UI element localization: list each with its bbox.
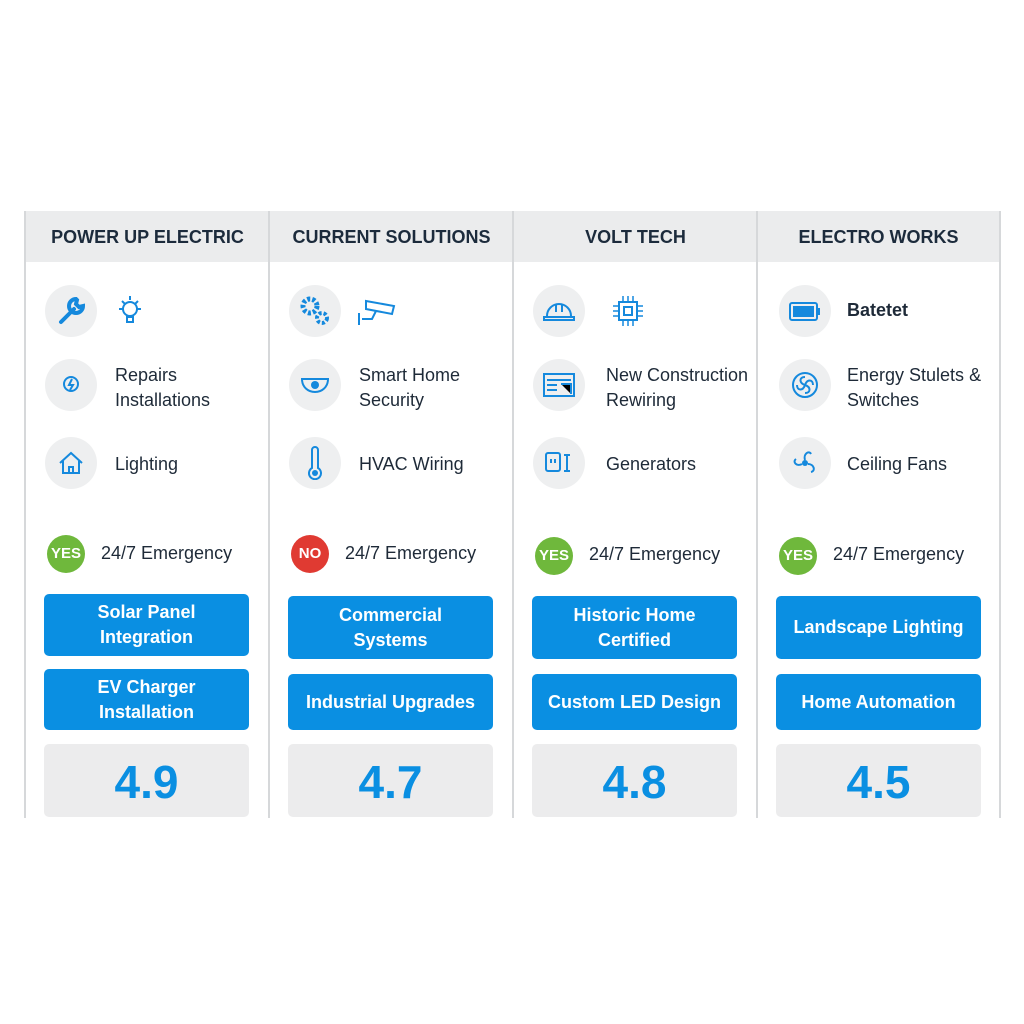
text: 24/7 Emergency	[345, 543, 476, 563]
text	[847, 365, 981, 410]
button: Systems	[353, 630, 428, 650]
icon: chip	[613, 296, 643, 326]
text: 24/7 Emergency	[833, 544, 964, 564]
button: Home Automation	[801, 692, 956, 712]
button: Industrial Upgrades	[306, 692, 475, 712]
badge: yes	[47, 535, 85, 573]
heading: VOLT TECH	[585, 227, 686, 247]
text: HVAC Wiring	[359, 454, 464, 474]
button: Commercial	[339, 604, 442, 624]
rating	[532, 744, 737, 817]
text: Energy Stulets &	[847, 365, 981, 385]
button: EV: EV Charger	[97, 676, 196, 696]
button: Certified	[598, 630, 671, 650]
button: Historic Home	[573, 604, 696, 624]
text: Rewiring	[606, 390, 676, 410]
badge: no: NO	[299, 545, 321, 562]
text: batetet: Batetet	[847, 300, 908, 320]
badge: yes	[535, 537, 573, 575]
button: Custom LED Design	[548, 692, 721, 712]
column: Volt Tech	[512, 211, 757, 818]
text: 24/7 Emergency	[589, 544, 720, 564]
column: Power Up Electric	[24, 211, 269, 818]
rating	[288, 744, 493, 817]
column: Current Solutions	[268, 211, 513, 818]
text: repairs installations	[115, 365, 210, 410]
text: Security	[359, 390, 424, 410]
text: New Construction	[606, 365, 748, 385]
rating: 4.7	[359, 756, 422, 808]
icon: hard hat	[533, 285, 585, 337]
heading: CURRENT SOLUTIONS	[292, 227, 490, 247]
column: Electro Works	[756, 211, 1001, 818]
text: Ceiling Fans	[847, 454, 947, 474]
badge: yes: YES	[539, 547, 569, 564]
button: Landscape Lighting	[793, 617, 964, 637]
icon: camera	[358, 300, 396, 325]
icon: thermometer	[289, 437, 341, 489]
text	[359, 365, 460, 410]
button: solar	[44, 594, 249, 656]
badge: yes	[779, 537, 817, 575]
heading: POWER UP ELECTRIC	[51, 227, 244, 247]
icon: panel	[533, 359, 585, 411]
rating: 4.8	[603, 756, 666, 808]
button	[776, 596, 981, 659]
icon: fan	[779, 359, 831, 411]
text: Switches	[847, 390, 919, 410]
text: emergency: 24/7 Emergency	[101, 543, 232, 563]
icon: gears	[289, 285, 341, 337]
icon: outlet	[533, 437, 585, 489]
icon: house	[45, 437, 97, 489]
heading: ELECTRO WORKS	[798, 227, 958, 247]
icon: dome camera	[289, 359, 341, 411]
button: EV: Installation	[99, 702, 194, 722]
rating: 4.9	[115, 756, 178, 808]
badge: yes: YES	[783, 547, 813, 564]
icon: wrench	[45, 285, 97, 337]
rating	[44, 744, 249, 817]
button	[776, 674, 981, 730]
icon: lightbulb bolt	[45, 359, 97, 411]
icon: ceiling fan	[779, 437, 831, 489]
text: repairs installations: Installations	[115, 390, 210, 410]
text: Smart Home	[359, 365, 460, 385]
button	[532, 674, 737, 730]
button	[288, 674, 493, 730]
button: solar: Solar Panel	[97, 602, 196, 622]
text: Generators	[606, 454, 696, 474]
badge: no	[291, 535, 329, 573]
badge: yes: YES	[51, 545, 81, 562]
rating: 4.5	[847, 756, 910, 808]
icon: bulb	[119, 296, 141, 323]
button: EV	[44, 669, 249, 730]
text: repairs installations: Repairs	[115, 365, 177, 385]
text: lighting: Lighting	[115, 454, 178, 474]
button: solar: Integration	[100, 627, 193, 647]
button	[288, 596, 493, 659]
comparison table	[24, 211, 1001, 818]
button	[532, 596, 737, 659]
text	[606, 365, 748, 410]
icon: battery	[779, 285, 831, 337]
rating	[776, 744, 981, 817]
